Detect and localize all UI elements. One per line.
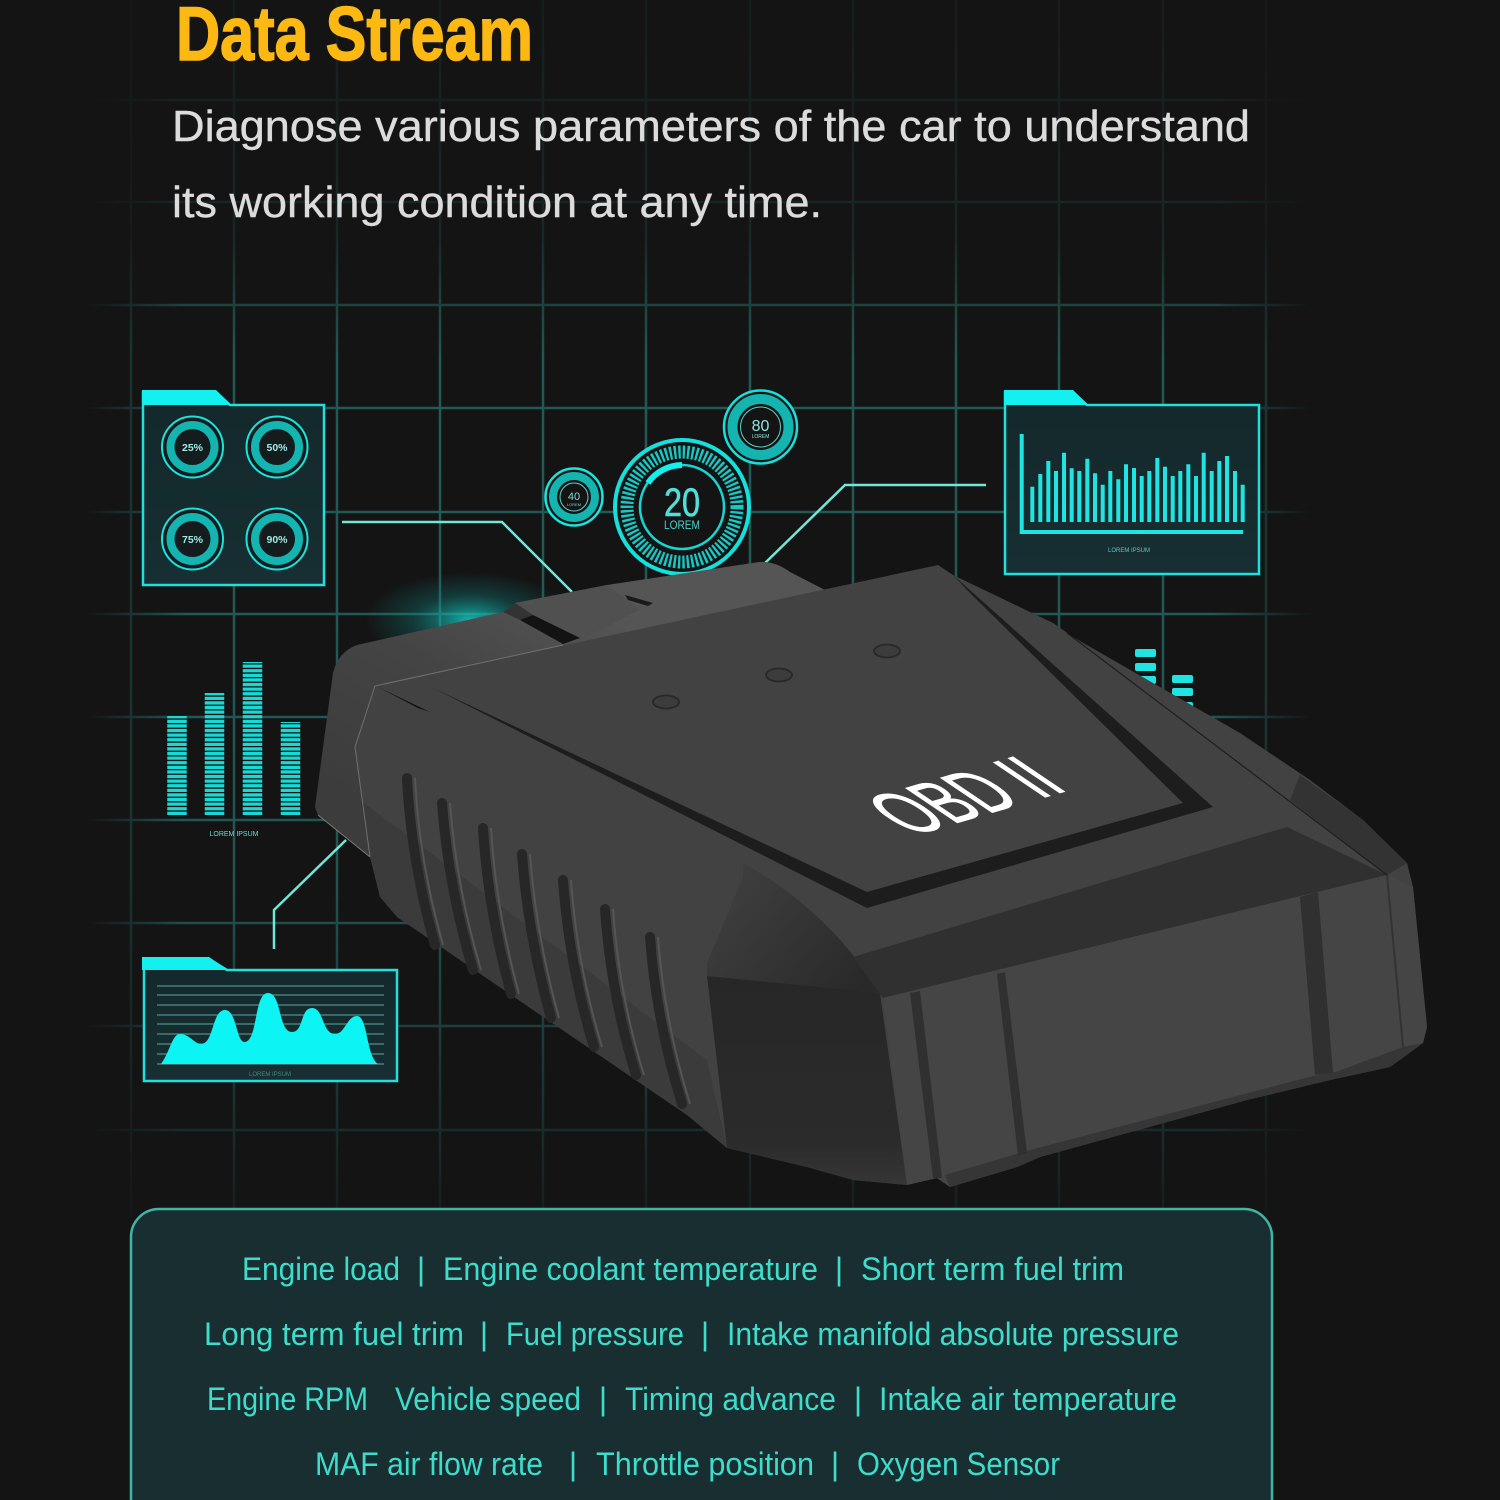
corner facet upper [707, 863, 880, 993]
panel: percentage gauges folder [142, 390, 324, 585]
parameter row 4: Oxygen Sensor [857, 1446, 1060, 1482]
front grooves [910, 892, 1333, 1178]
vent ridges [415, 778, 690, 1104]
parameter row 4: Throttle position [596, 1446, 814, 1482]
chart: striped column bars [177, 662, 290, 838]
glow behind device [365, 572, 575, 668]
latch notch [520, 615, 580, 644]
panel: percentage gauges folder: 75% [182, 534, 204, 546]
dark sliver [378, 687, 430, 712]
parameter row 4 [315, 1446, 1060, 1482]
description text: its working condition at any time. [172, 178, 822, 227]
vents [407, 778, 682, 1104]
device body silhouette [355, 565, 1427, 1187]
gauge: 40: LOREM [567, 502, 581, 507]
parameter row 4: | [569, 1446, 577, 1482]
connector latch block [515, 585, 640, 640]
gauge: 80: LOREM [752, 434, 769, 440]
panel: bar chart folder [1004, 390, 1259, 574]
panel: percentage gauges folder: 50% [266, 442, 288, 454]
gauge: 80: 80 [752, 418, 770, 435]
parameter row 2: Intake manifold absolute pressure [727, 1316, 1179, 1352]
parameter row 1: Engine load [242, 1251, 400, 1287]
panel: area chart folder [142, 957, 397, 1081]
device: OBD II adapter [315, 562, 1427, 1187]
parameter row 2: | [480, 1316, 488, 1352]
panel: data stream parameters [131, 1209, 1272, 1500]
parameter row 3: | [599, 1381, 607, 1417]
top plate recess strip [435, 575, 1213, 908]
side rim highlight [355, 645, 563, 857]
connector line: area chart to device [274, 840, 346, 949]
parameter row 1: | [835, 1251, 843, 1287]
parameter row 1: | [417, 1251, 425, 1287]
description text: Diagnose various parameters of the car to understand [172, 102, 1250, 151]
parameter row 4: | [831, 1446, 839, 1482]
parameter row 3: Vehicle speed [395, 1381, 581, 1417]
gauge: 40: 40 [568, 491, 580, 503]
connector block [315, 562, 825, 857]
parameter row 3: Intake air temperature [879, 1381, 1177, 1417]
parameter row 3: | [854, 1381, 862, 1417]
connector slot [625, 595, 653, 606]
parameter row 1: Engine coolant temperature [443, 1251, 818, 1287]
front underside [945, 1043, 1423, 1187]
chart: striped column bars: LOREM IPSUM [209, 831, 259, 838]
parameter row 4: MAF air flow rate [315, 1446, 543, 1482]
chart: small bars behind device [1135, 649, 1193, 710]
front face [883, 875, 1427, 1187]
OBD II label: OBD II [845, 745, 1086, 847]
gauge: 40 [546, 468, 602, 526]
thin seam [1067, 633, 1387, 875]
connector line: gauges to device [342, 522, 572, 592]
front edge line [1387, 875, 1403, 1047]
parameter row 2 [204, 1316, 1179, 1352]
parameter row 1: Short term fuel trim [861, 1251, 1124, 1287]
right corner facet [1290, 775, 1407, 875]
panel: percentage gauges folder: 90% [266, 534, 288, 546]
panel: area chart folder: LOREM IPSUM [249, 1072, 291, 1078]
parameter row 3: Engine RPM [207, 1381, 368, 1417]
panel: percentage gauges folder: 25% [182, 442, 204, 454]
parameter row 3: Timing advance [625, 1381, 836, 1417]
parameter row 2: Long term fuel trim [204, 1316, 464, 1352]
corner facet lower [707, 976, 907, 1185]
gauge: 20: 20 [664, 481, 700, 525]
gauge: 20 [615, 440, 749, 574]
gauge: 20: LOREM [664, 518, 700, 532]
parameter row 1 [242, 1251, 1124, 1287]
side lower tone [360, 800, 727, 1148]
parameter row 3 [207, 1381, 1177, 1417]
parameter row 2: | [701, 1316, 709, 1352]
LED indicators [653, 644, 900, 708]
connector rim light [318, 815, 370, 857]
chamfer band [853, 827, 1387, 998]
panel: bar chart folder: LOREM IPSUM [1108, 548, 1150, 554]
latch bevel [503, 603, 533, 620]
connector line: bar chart to device [762, 485, 986, 566]
description text [172, 102, 1250, 227]
gauge: 80 [724, 390, 797, 464]
parameter row 2: Fuel pressure [506, 1316, 684, 1352]
